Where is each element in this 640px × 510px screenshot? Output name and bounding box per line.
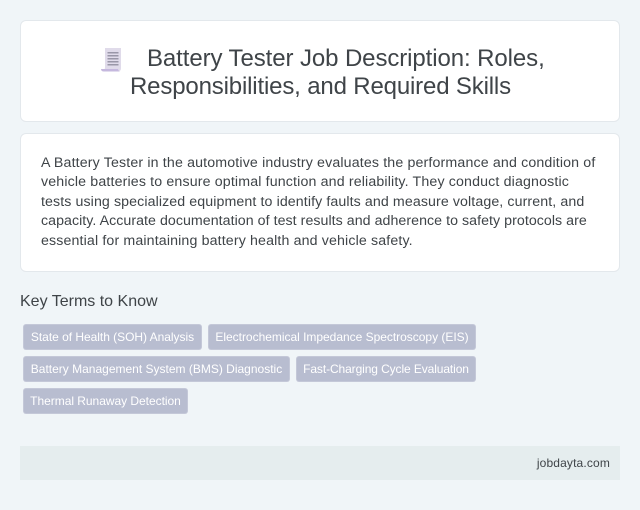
tag: EIS: Electrochemical Impedance Spectroscopy (EIS) — [215, 330, 469, 344]
panel: title card — [20, 20, 620, 122]
footer bar — [20, 446, 620, 480]
text block: description: A Battery Tester in the automotive industry evaluates the performance and condition of — [41, 155, 595, 171]
icon: document receipt — [101, 48, 121, 72]
tag: fast charging — [297, 357, 475, 381]
tag: fast charging: Fast-Charging Cycle Evaluation — [303, 362, 469, 376]
tag: thermal runaway: Thermal Runaway Detection — [30, 394, 181, 408]
tag: SOH — [24, 325, 201, 349]
panel: description card — [20, 133, 620, 272]
text block: description: vehicle batteries to ensure optimal function and reliability. They conduct diagnostic — [41, 174, 569, 190]
tag: thermal runaway — [24, 389, 187, 413]
title: Battery Tester Job Description: Roles, — [147, 45, 545, 72]
text block: description: capacity. Accurate documentation of test results and adherence to safety protocols are — [41, 213, 587, 229]
text block: description: tests using specialized equipment to identify faults and measure voltage, current, and — [41, 194, 584, 210]
footer: site name: jobdayta.com — [537, 456, 610, 470]
heading: key terms: Key Terms to Know — [20, 293, 158, 310]
title — [130, 45, 545, 100]
title: Responsibilities, and Required Skills — [130, 73, 511, 100]
tag: EIS — [209, 325, 475, 349]
text block: description: essential for maintaining battery health and vehicle safety. — [41, 233, 413, 249]
tag: SOH: State of Health (SOH) Analysis — [31, 330, 194, 344]
panel: key term tags — [23, 324, 476, 414]
tag: BMS: Battery Management System (BMS) Diagnostic — [31, 362, 282, 376]
text block: description — [41, 155, 596, 249]
tag: BMS — [24, 357, 289, 381]
